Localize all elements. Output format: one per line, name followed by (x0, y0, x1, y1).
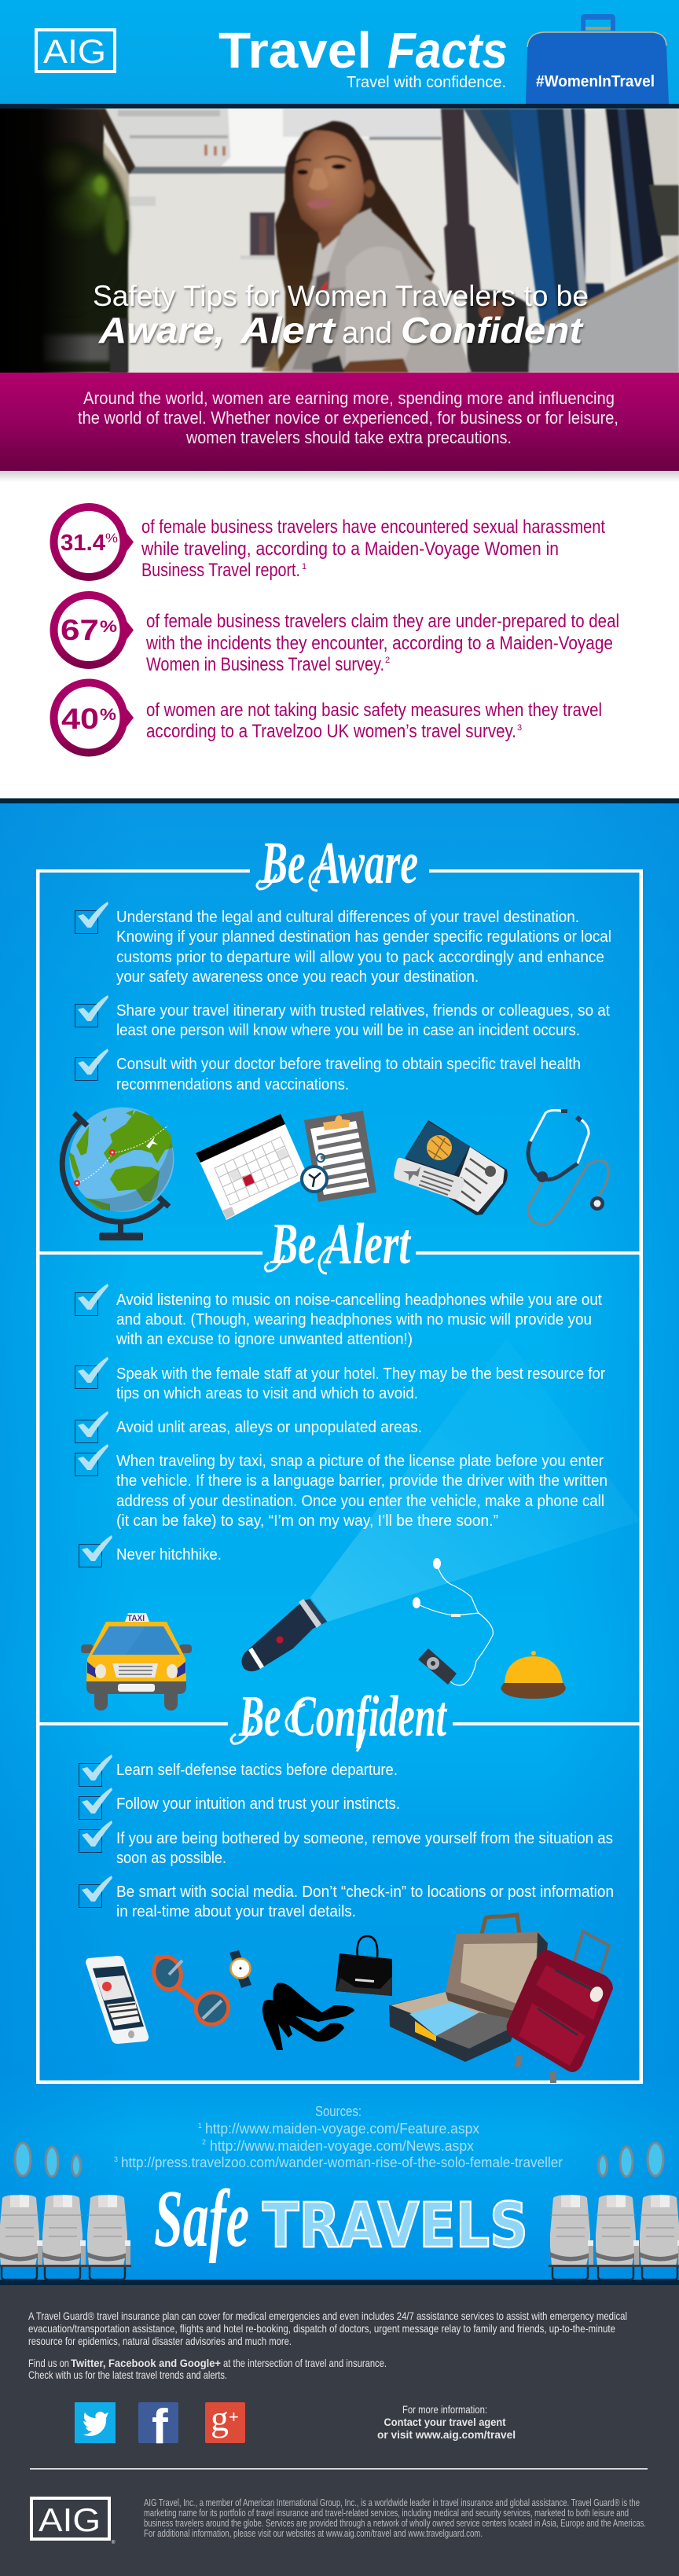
social invitation: Check with us for the latest travel trends and alerts. (28, 2368, 227, 2381)
background: white building and dome (102, 108, 448, 373)
tip text (116, 1292, 602, 1348)
check icon (75, 1049, 108, 1080)
stat: 40%: 3 (517, 723, 522, 733)
title: Safe Travels: Safe (154, 2174, 249, 2264)
checklist: Be Aware (75, 902, 611, 1093)
heading: Be Aware: Be Aware (260, 830, 418, 896)
icon: handbag (336, 1936, 392, 1996)
icon: globe (62, 1107, 174, 1240)
social invitation: Find us on (28, 2357, 69, 2369)
tip text: Never hitchhike. (116, 1546, 222, 1564)
sources: 1 (198, 2122, 202, 2130)
icon: facebook (138, 2400, 178, 2454)
stat: 67%: Women in Business Travel survey. (146, 654, 384, 675)
badge: 40 (61, 703, 99, 735)
contact info: or visit www.aig.com/travel (377, 2428, 516, 2441)
title: Travel Facts (218, 22, 508, 79)
icon: phone and earphones (413, 1558, 493, 1685)
tip text: your safety awareness once you reach your destination. (116, 968, 479, 986)
tip text: If you are being bothered by someone, remove yourself from the situation as (116, 1830, 613, 1847)
icon: stethoscope (528, 1109, 608, 1225)
blue tips panel (0, 798, 679, 2280)
heading: Be Aware (257, 830, 418, 896)
tip text: Be smart with social media. Don’t “check-in” to locations or post information (116, 1883, 614, 1901)
check icon (79, 1788, 112, 1819)
icon: google plus (205, 2398, 245, 2443)
tip text: Speak with the female staff at your hotel. They may be the best resource for (116, 1365, 605, 1383)
check icon (79, 1821, 112, 1852)
tip text: Consult with your doctor before traveling to obtain specific travel health (116, 1056, 581, 1073)
hair (262, 121, 435, 373)
badge: % (105, 531, 118, 546)
tip text: and about. (Though, wearing headphones with no music will provide you (116, 1311, 592, 1328)
flashlight beam (310, 1338, 640, 1622)
icon: taxi: TAXI (127, 1614, 145, 1623)
architecture at right: columns, pillars and mesh (441, 108, 679, 373)
icon: google plus: g (211, 2398, 229, 2438)
tip text: Knowing if your planned destination has gender specific regulations or local (116, 928, 611, 946)
tip text (116, 1056, 581, 1093)
tip text: Share your travel itinerary with trusted relatives, friends or colleagues, so at (116, 1002, 610, 1020)
stat: 40%: according to a Travelzoo UK women’s travel survey. (146, 721, 516, 742)
icon: clipboard and stopwatch (302, 1111, 376, 1202)
travel guard description (28, 2310, 627, 2347)
airplane windows (15, 2143, 663, 2177)
tip text: Avoid unlit areas, alleys or unpopulated areas. (116, 1419, 422, 1436)
check icon (75, 1357, 108, 1388)
neck (317, 226, 342, 250)
legal text (144, 2497, 646, 2539)
footer (0, 2280, 679, 2576)
photo heading: Aware, (98, 310, 225, 351)
stat: 67% (53, 595, 619, 675)
stat: 31.4%: Business Travel report. (141, 560, 300, 581)
tip text (116, 1883, 614, 1920)
green bush (0, 108, 129, 373)
legal text: For additional information, please visit our websites at www.aig.com/travel and www.travelguard.com. (144, 2528, 483, 2539)
stat: 31.4%: 1 (302, 562, 306, 571)
title: Travel Facts: Travel (218, 22, 372, 79)
sources: http://www.maiden-voyage.com/Feature.aspx (205, 2121, 479, 2137)
icon: flashlight (241, 1599, 327, 1671)
badge: 31.4 (61, 531, 105, 556)
stat: 40% (53, 682, 602, 753)
check icon (75, 1284, 108, 1316)
contact info (377, 2403, 516, 2441)
tip text (116, 1002, 610, 1039)
tip text: tips on which areas to visit and which to avoid. (116, 1385, 418, 1402)
contact info: For more information: (402, 2403, 487, 2416)
airplane seats left (0, 2195, 131, 2280)
tagline: Travel with confidence. (347, 74, 506, 91)
tip text: the vehicle. If there is a language barrier, provide the driver with the written (116, 1472, 607, 1490)
icon: smartphone (86, 1956, 149, 2044)
check icon (79, 1755, 112, 1786)
tip text: address of your destination. Once you enter the vehicle, make a phone call (116, 1493, 604, 1510)
check icon (79, 1876, 112, 1907)
tip text: soon as possible. (116, 1850, 226, 1867)
icon: google plus: + (229, 2407, 239, 2427)
badge (53, 507, 134, 577)
icon: service bell (501, 1651, 566, 1699)
sources: 3 (114, 2155, 118, 2163)
badge (53, 682, 134, 753)
icon: wristwatch (229, 1950, 251, 1988)
tip text: least one person will know where you will be in case an incident occurs. (116, 1022, 580, 1039)
check icon (75, 902, 108, 934)
coat (281, 208, 472, 373)
photo heading: and (342, 317, 392, 350)
tip text (116, 1830, 613, 1867)
sources: Sources: (315, 2104, 362, 2119)
icon: taxi (81, 1613, 192, 1711)
tip text: recommendations and vaccinations. (116, 1076, 349, 1093)
airplane seats right (549, 2195, 679, 2280)
stat: 40%: of women are not taking basic safety measures when they travel (146, 700, 602, 721)
check icon (75, 1411, 108, 1443)
stat: 31.4%: while traveling, according to a Maiden-Voyage Women in (141, 538, 559, 560)
badge (53, 595, 134, 665)
tip text: customs prior to departure will allow you to pack accordingly and enhance (116, 949, 604, 966)
check icon (75, 995, 108, 1027)
intro band: the world of travel. Whether novice or experienced, for business or for leisure, (78, 408, 618, 428)
sources (114, 2104, 563, 2170)
social invitation (28, 2357, 387, 2381)
stat: 67%: 2 (385, 656, 390, 665)
social invitation: Twitter, Facebook and Google+ (71, 2357, 221, 2369)
sources: http://www.maiden-voyage.com/News.aspx (210, 2138, 474, 2154)
intro band (0, 373, 679, 482)
contact info: Contact your travel agent (384, 2416, 506, 2428)
AIG logo: AIG (43, 33, 106, 71)
icon: red rolling luggage (507, 1931, 613, 2083)
AIG logo (36, 30, 115, 72)
checklist: Be Confident (79, 1755, 614, 1920)
icon: open suitcase (389, 1915, 548, 2062)
tip text: Understand the legal and cultural differences of your travel destination. (116, 909, 579, 926)
travel guard description: resource for epidemics, natural disaster advisories and much more. (28, 2335, 292, 2347)
sources: 2 (202, 2138, 206, 2146)
tip text (116, 1365, 605, 1402)
sources: http://press.travelzoo.com/wander-woman-rise-of-the-solo-female-traveller (121, 2155, 563, 2170)
icon: calendar (196, 1114, 308, 1220)
tip text: with an excuse to ignore unwanted attention!) (116, 1331, 413, 1348)
photo: woman traveler (0, 108, 679, 373)
photo heading: Safety Tips for Women Travelers to be (93, 280, 589, 312)
arm and phone (340, 358, 409, 373)
AIG logo footer: ® (112, 2540, 116, 2545)
tip text (116, 909, 611, 986)
check icon (79, 1535, 112, 1567)
checklist: Be Alert (75, 1284, 607, 1567)
intro band: women travelers should take extra precautions. (185, 428, 512, 447)
dark building at left (16, 108, 137, 373)
icon: facebook: f (152, 2400, 168, 2454)
icon: passport and boarding pass (394, 1120, 508, 1215)
check icon (75, 1444, 108, 1476)
stat: 67%: with the incidents they encounter, according to a Maiden-Voyage (145, 633, 613, 654)
heading: Be Confident: Be Confident (238, 1685, 448, 1749)
intro band: Around the world, women are earning more, spending more and influencing (83, 388, 615, 408)
icon: blue suitcase with hashtag (526, 14, 669, 104)
icon: twitter (75, 2402, 116, 2443)
badge: % (100, 706, 116, 724)
face (293, 130, 365, 232)
title: Travel Facts: Facts (387, 22, 508, 79)
photo heading (93, 280, 589, 351)
AIG logo footer (31, 2498, 116, 2545)
photo heading: Alert (240, 310, 336, 351)
tip text: Follow your intuition and trust your instincts. (116, 1795, 400, 1813)
icon: sunglasses (150, 1953, 235, 2030)
title: Safe Travels: TRAVELS (262, 2191, 528, 2262)
photo heading: Confident (401, 310, 584, 351)
tip text: Learn self-defense tactics before departure. (116, 1762, 398, 1779)
tip text (116, 1453, 607, 1530)
heading: Be Confident (231, 1685, 448, 1751)
AIG logo footer: AIG (39, 2501, 101, 2538)
badge: % (100, 618, 117, 636)
icon: high heels (262, 1983, 354, 2050)
badge: 67 (61, 614, 99, 646)
social invitation: at the intersection of travel and insurance. (223, 2357, 387, 2369)
title: Safe Travels (154, 2174, 528, 2264)
tip text: in real-time about your travel details. (116, 1903, 356, 1920)
header banner (0, 0, 679, 104)
tip text: Avoid listening to music on noise-cancelling headphones while you are out (116, 1292, 602, 1309)
white frame (36, 869, 643, 2084)
heading: Be Alert: Be Alert (270, 1212, 412, 1277)
stat: 31.4% (53, 507, 605, 581)
woman (262, 121, 472, 373)
tip text: When traveling by taxi, snap a picture of the license plate before you enter (116, 1453, 604, 1470)
tip text: (it can be fake) to say, “I’m on my way, I’ll be there soon.” (116, 1512, 498, 1530)
icon: blue suitcase with hashtag: #WomenInTravel (536, 73, 655, 90)
